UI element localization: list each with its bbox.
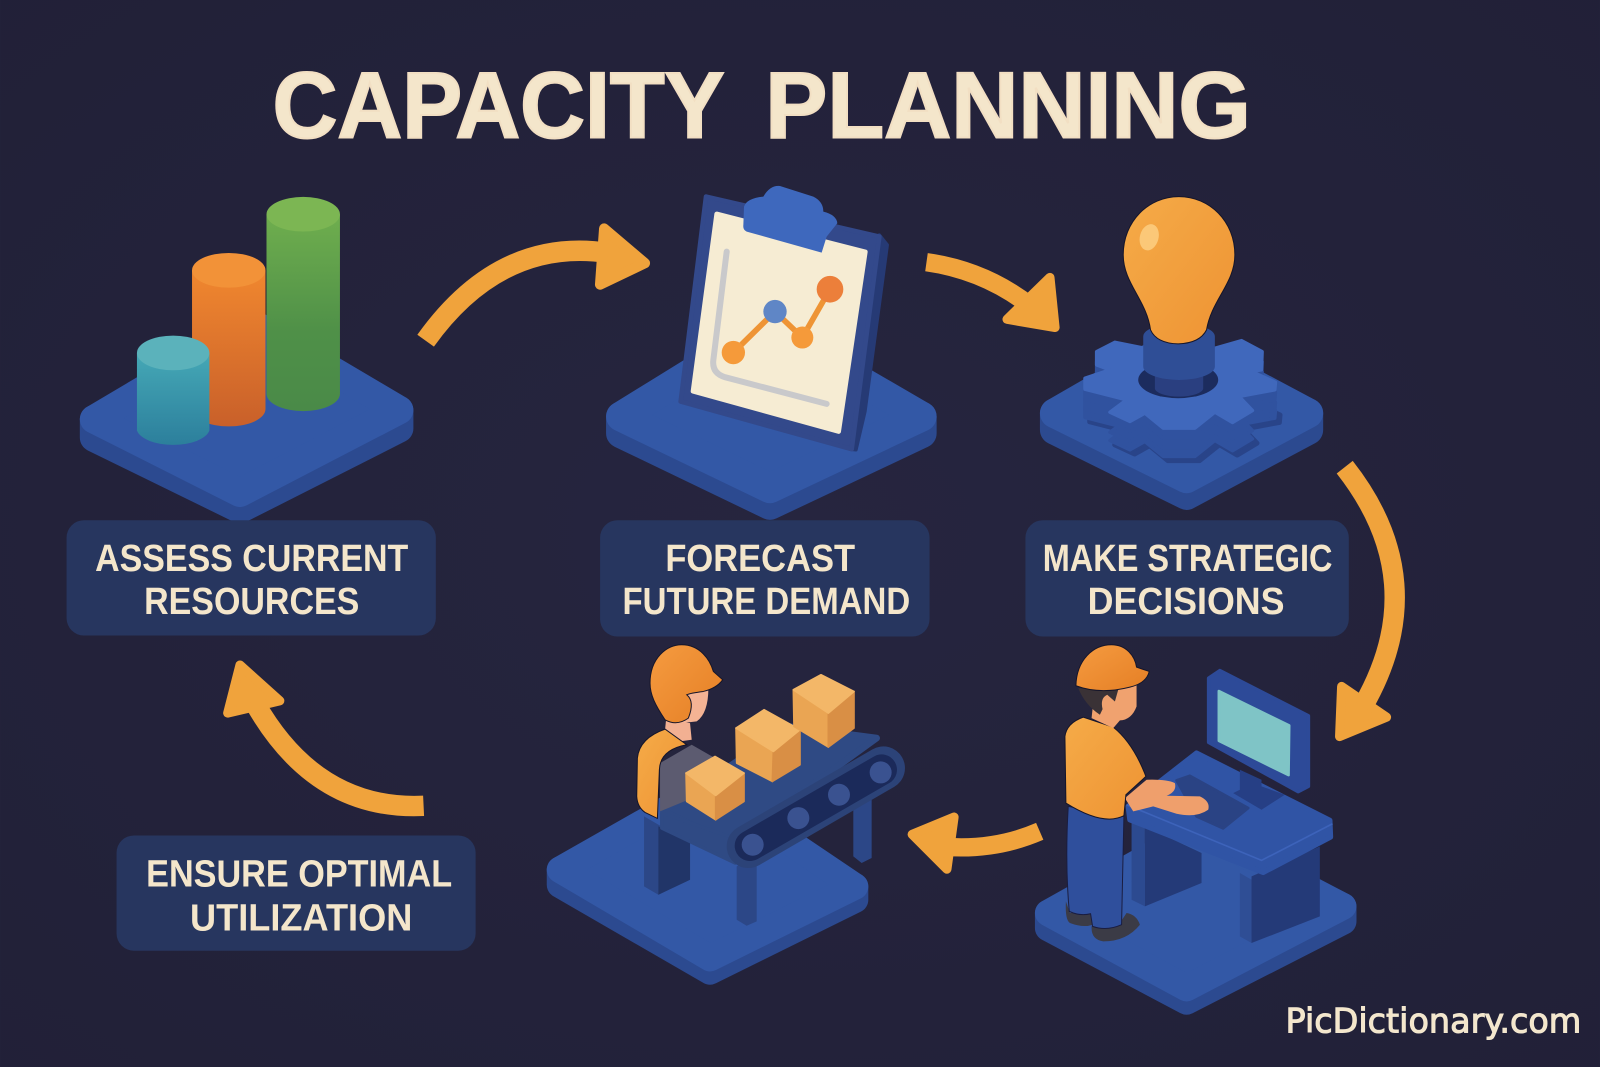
socket collar (1143, 323, 1215, 380)
platform 3 (1055, 343, 1308, 495)
teal cylinder (137, 336, 209, 445)
label: make strategic decisions (1025, 520, 1349, 637)
platform 4 (560, 786, 855, 971)
forearm and hand (1125, 780, 1209, 815)
hard hat (1076, 645, 1149, 691)
arrow: assess to forecast (426, 228, 645, 341)
label: forecast future demand: FORECAST (665, 537, 855, 579)
clipboard paper (693, 214, 865, 432)
clipboard board (681, 197, 879, 449)
lower stem (1155, 377, 1203, 397)
label: assess current resources: ASSESS CURRENT (95, 537, 408, 579)
arrow: forecast to decisions (926, 262, 1055, 327)
label: forecast future demand (600, 520, 930, 637)
label: make strategic decisions: MAKE STRATEGIC (1043, 537, 1332, 579)
box 2 (736, 710, 800, 781)
step 2: forecast icon (621, 186, 922, 505)
chart axes (713, 252, 827, 404)
torso (660, 745, 715, 811)
worker figure (637, 645, 723, 818)
box 1 (686, 756, 744, 820)
label: forecast future demand: FUTURE DEMAND (623, 580, 910, 622)
face (682, 686, 708, 723)
arrow: operator to conveyor (912, 817, 1040, 869)
step 3: strategic decisions icon (1055, 197, 1308, 495)
neck (665, 720, 692, 741)
clipboard clip (743, 186, 837, 253)
vest shoulder (637, 729, 687, 818)
step 1: assess current resources icon (94, 197, 399, 509)
platform 1 (94, 324, 399, 509)
light bulb (1123, 197, 1235, 344)
platform 5 (1048, 830, 1343, 1001)
gear sides (1085, 351, 1276, 457)
line chart (722, 276, 843, 364)
trousers (1067, 806, 1124, 929)
conveyor legs (644, 800, 872, 926)
label: ensure optimal utilization (117, 835, 476, 951)
arrow: decisions to operator (1340, 467, 1395, 736)
head (1092, 685, 1137, 728)
label: assess current resources: RESOURCES (144, 580, 359, 622)
box 3 (793, 675, 854, 747)
monitor stand (1233, 770, 1285, 810)
gear hole (1138, 362, 1218, 398)
green cylinder (266, 197, 340, 411)
label: ensure optimal utilization: ENSURE OPTIMAL (146, 852, 452, 894)
label: make strategic decisions: DECISIONS (1088, 580, 1285, 622)
step 4: operator at computer icon (1048, 645, 1343, 1001)
gear shadow (1090, 373, 1280, 461)
gear top face (1085, 341, 1276, 428)
title: CAPACITY (273, 53, 725, 158)
title: PLANNING (765, 53, 1251, 158)
operator figure (1065, 645, 1209, 941)
clipboard board side (850, 235, 887, 450)
desk top (1127, 753, 1332, 872)
platform 2 (621, 327, 922, 505)
hair (1078, 688, 1118, 715)
watermark: PicDictionary.com (1286, 1001, 1581, 1040)
step 5: conveyor worker icon (560, 645, 892, 971)
hard hat and hair (650, 645, 723, 723)
monitor (1209, 670, 1309, 792)
shirt (1065, 717, 1146, 819)
label: ensure optimal utilization: UTILIZATION (190, 896, 412, 938)
keyboard (1177, 776, 1248, 828)
orange cylinder (192, 253, 265, 426)
desk legs (1132, 820, 1320, 943)
label: assess current resources (67, 520, 436, 636)
shoes (1066, 901, 1093, 926)
arrow: conveyor to ensure utilization loop (228, 665, 424, 806)
title (273, 53, 1251, 158)
conveyor belt top (662, 726, 877, 863)
conveyor side with rollers (742, 761, 892, 856)
